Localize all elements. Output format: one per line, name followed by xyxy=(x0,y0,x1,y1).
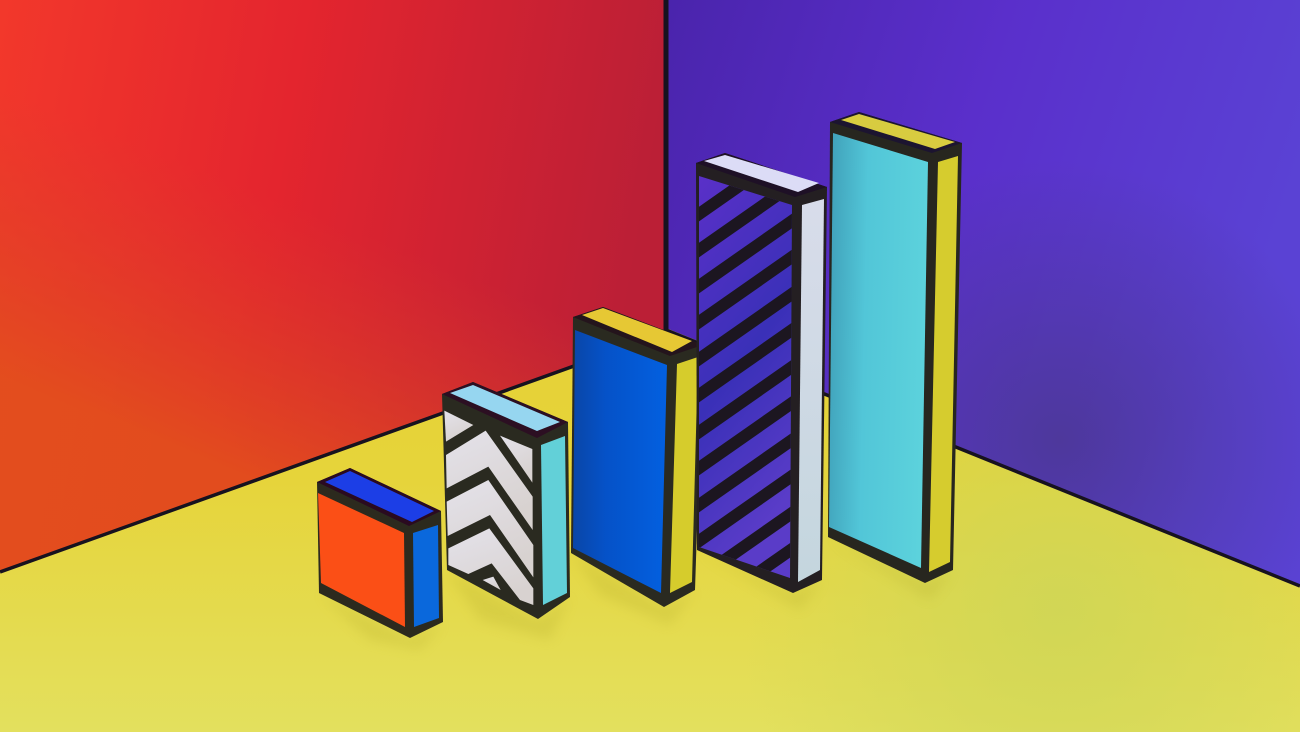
floor shadows under bars xyxy=(319,537,953,650)
bar 2: chevron front, teal side xyxy=(442,382,570,619)
bar 4: diagonal stripe front, pale side xyxy=(696,153,827,593)
diagonal stripes xyxy=(699,186,792,572)
chevron pattern xyxy=(444,411,533,605)
bar 1: orange front, blue side xyxy=(317,468,443,638)
wall: purple xyxy=(666,0,1300,585)
bar 5: teal front, yellow side xyxy=(828,112,962,583)
wall: red xyxy=(0,0,666,572)
bar 3: blue front, yellow side xyxy=(571,307,703,607)
